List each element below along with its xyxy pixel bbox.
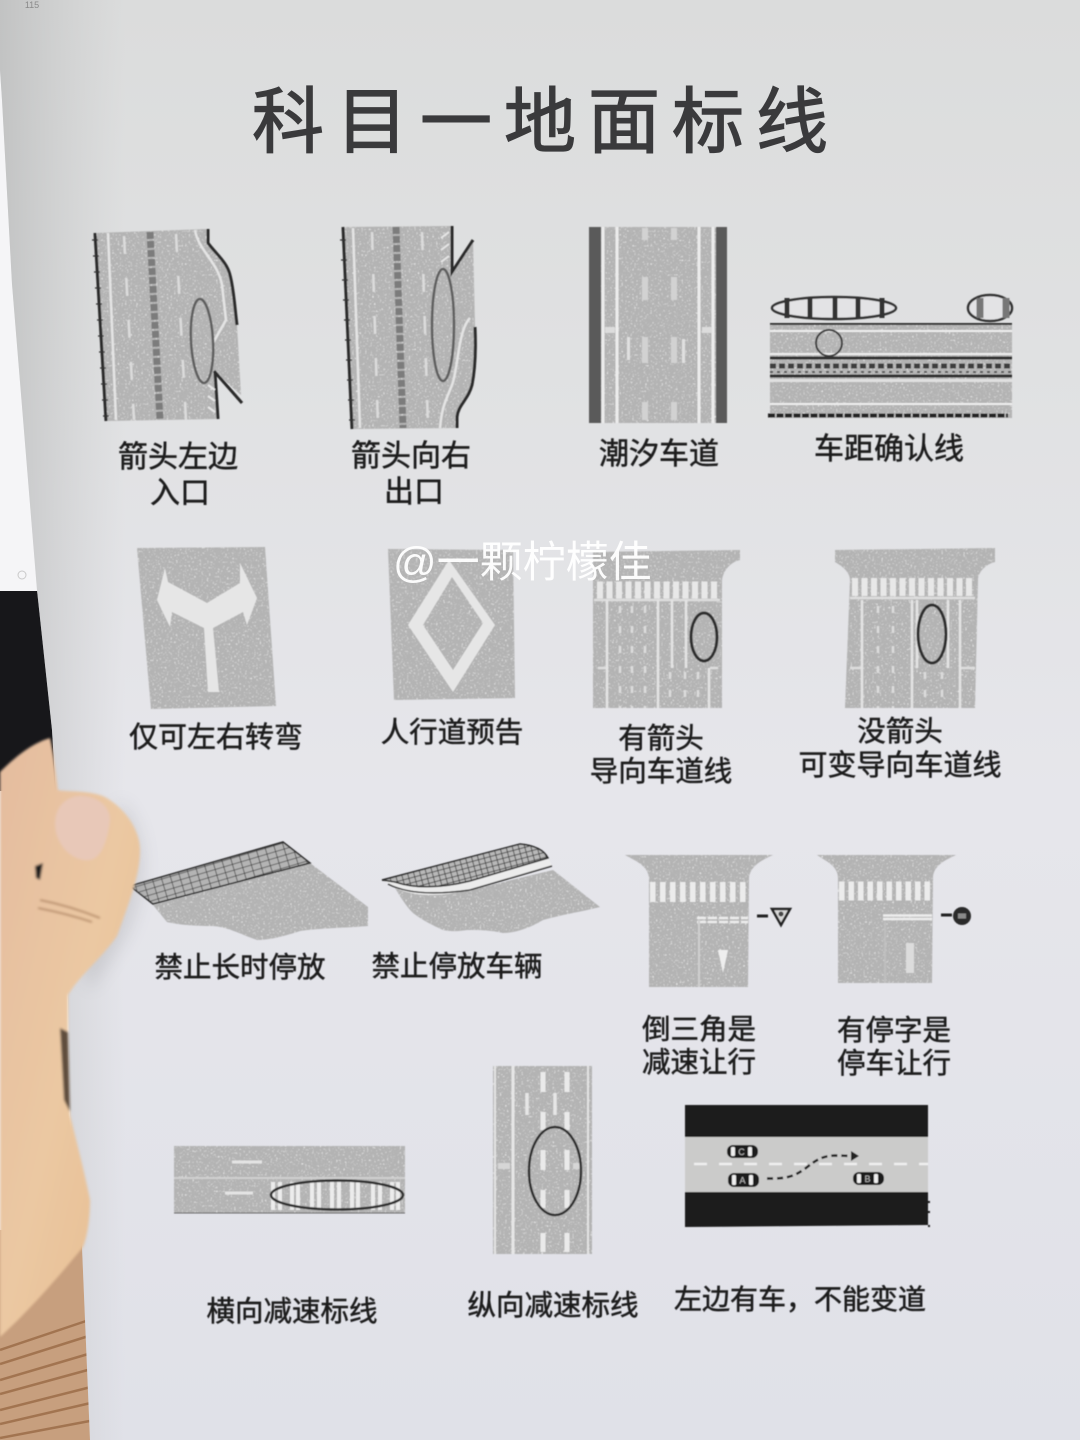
panel: no vehicle parking: [371, 844, 600, 983]
icon: yield sign with pointer: [757, 909, 790, 925]
curb diagram: [130, 842, 368, 940]
stop word marking: [906, 943, 914, 973]
label line 2: 出口: [384, 476, 444, 509]
gap shadow: [60, 1028, 70, 1112]
label: 箭头左边: [118, 441, 238, 474]
panel: arrow left entrance: [92, 229, 242, 510]
panel: no long-term parking: [130, 842, 368, 984]
sign: [137, 547, 276, 709]
road diagram: [589, 227, 727, 423]
paper edge shading: [0, 0, 130, 1440]
panel: crosswalk ahead: [381, 549, 523, 749]
road diagram: [92, 229, 242, 421]
road diagram: [625, 855, 773, 987]
label: 潮汐车道: [599, 438, 719, 471]
label line 2: 停车让行: [837, 1048, 951, 1080]
label: 人行道预告: [381, 717, 523, 749]
road diagram: [174, 1146, 405, 1213]
label line 2: 减速让行: [642, 1047, 756, 1079]
label: 禁止长时停放: [154, 952, 326, 984]
title: 科目一地面标线: [252, 83, 840, 163]
panel: car on the left, no lane change: [674, 1105, 929, 1315]
car A: [728, 1173, 759, 1187]
road diagram: [593, 550, 740, 708]
dashed lane change arrow: [767, 1151, 859, 1179]
car A: A: [739, 1176, 746, 1186]
panel: longitudinal deceleration markings: [467, 1066, 639, 1322]
page number: 115: [25, 0, 39, 10]
icon: stop sign with pointer: [941, 907, 971, 925]
circled markings: [529, 1127, 581, 1215]
thumb crease: [38, 900, 100, 922]
label line 2: 导向车道线: [590, 756, 732, 788]
circled entrance: [189, 298, 215, 384]
label: 仅可左右转弯: [129, 721, 303, 754]
road diagram: [817, 855, 956, 983]
sign: [388, 549, 515, 700]
curb diagram: [382, 844, 600, 933]
thumbnail: [55, 796, 110, 860]
road scene: [685, 1105, 928, 1227]
circled exit: [432, 269, 454, 381]
panel: vehicle distance confirmation line: [768, 295, 1012, 466]
car C: [727, 1145, 758, 1158]
hand shadow on paper: [80, 800, 143, 990]
triangle marking: [718, 950, 728, 973]
hand holding the paper: [0, 738, 140, 1337]
road diagram: [340, 226, 475, 429]
label: 禁止停放车辆: [371, 951, 543, 983]
watermark: @一颗柠檬佳: [393, 539, 652, 587]
circled markings: [271, 1180, 403, 1210]
label: 车距确认线: [814, 433, 964, 466]
road diagram: [768, 295, 1012, 418]
panel: arrow guide lane: [590, 550, 740, 788]
label line 2: 可变导向车道线: [798, 749, 1002, 782]
label line 2: 入口: [150, 477, 210, 510]
panel: stop sign stop line: [817, 855, 971, 1080]
label: 纵向减速标线: [467, 1290, 639, 1322]
panel: inverted triangle yield: [625, 855, 790, 1079]
oval: confirmation bars: [772, 297, 896, 319]
label: 没箭头: [857, 716, 943, 748]
panel: arrow right exit: [340, 226, 475, 509]
circled marking: [816, 330, 842, 356]
car B: B: [864, 1174, 871, 1184]
specks beside scene: [928, 1201, 930, 1227]
panel: tidal lane: [589, 227, 727, 471]
circled lane: [918, 605, 946, 663]
road diagram: [493, 1066, 592, 1254]
car B: [853, 1172, 884, 1185]
label: 箭头向右: [351, 440, 471, 473]
road diagram: [835, 548, 995, 708]
label: 横向减速标线: [206, 1296, 378, 1328]
label: 有停字是: [837, 1015, 951, 1047]
diagrams and labels: [92, 226, 1012, 1328]
knuckle gap: [35, 863, 43, 880]
panel: no-arrow variable guide lane: [798, 548, 1002, 782]
label: 有箭头: [618, 723, 704, 755]
car C: C: [738, 1147, 745, 1157]
label: 倒三角是: [642, 1014, 756, 1046]
panel: left and right turn only: [129, 547, 303, 754]
panel: transverse deceleration markings: [174, 1146, 405, 1328]
circled lane: [691, 613, 717, 661]
oval: right detail: [968, 295, 1012, 321]
label: 左边有车，不能变道: [674, 1284, 926, 1315]
